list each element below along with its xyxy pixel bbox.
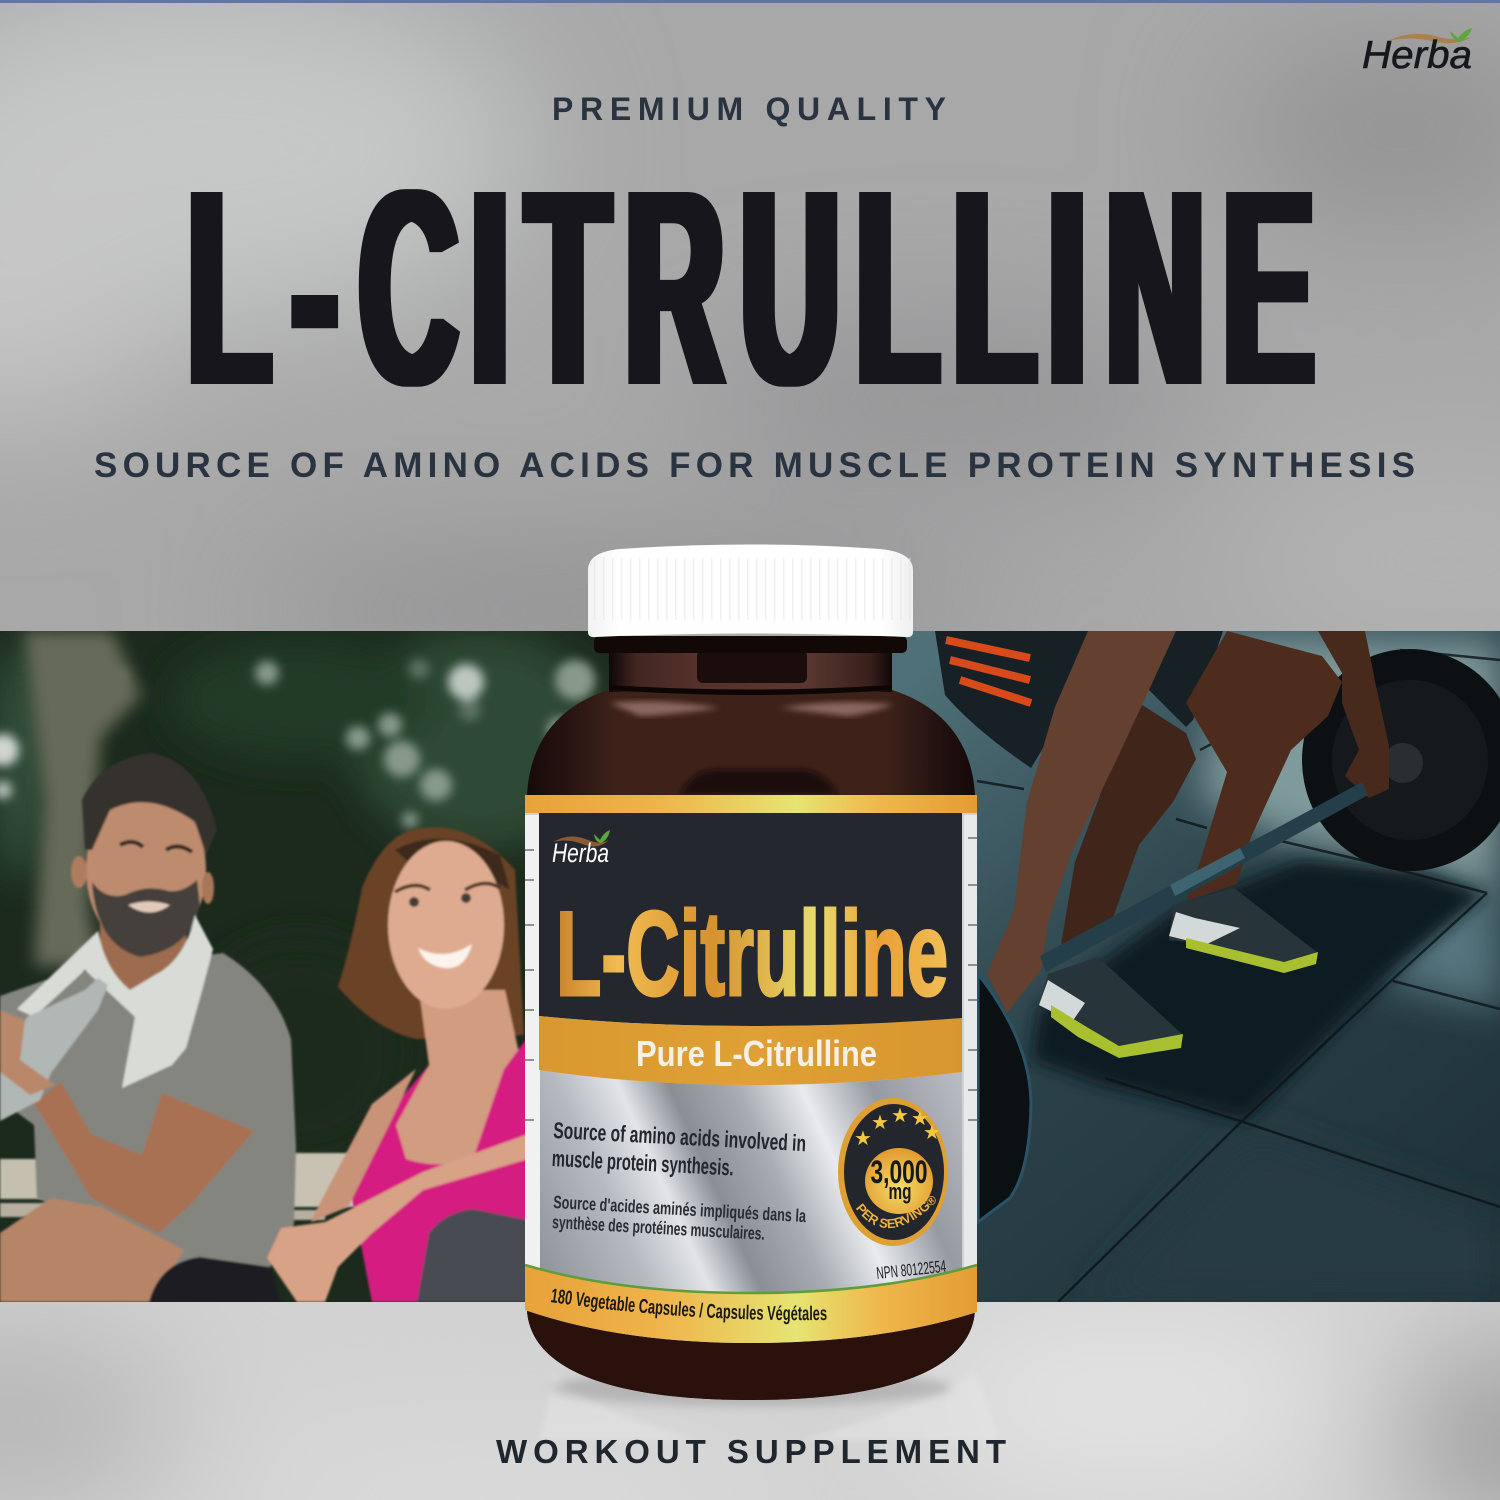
label: side strips: [525, 795, 977, 1355]
background: upper grey panel: [0, 0, 1500, 670]
bench: [0, 1153, 355, 1220]
woman: hair: [338, 827, 524, 1039]
floor tile seams: [977, 650, 1500, 1302]
label: English claim: Source of amino acids involved in: [553, 1117, 807, 1156]
man: hand: [0, 1010, 55, 1095]
woman: neck and chest: [390, 990, 525, 1180]
woman: pink top: [352, 1037, 528, 1302]
shoe: back: [1169, 888, 1318, 973]
bottle collar: [594, 636, 907, 653]
man: face: [84, 800, 208, 924]
badge: 3,000 mg per serving: ★: [891, 1105, 909, 1127]
label: top gold band: [525, 795, 977, 813]
subtitle: source of amino acids: SOURCE OF AMINO ACIDS FOR MUSCLE PROTEIN SYNTHESIS: [94, 446, 1415, 485]
barbell plate, right: [1302, 649, 1500, 871]
label: French claim: [552, 1192, 807, 1246]
bottle body: [527, 690, 975, 1400]
label: Pure L-Citrulline: Pure L-Citrulline: [636, 1033, 877, 1074]
badge: 3,000 mg per serving: mg: [888, 1179, 912, 1204]
man: beard: [92, 880, 200, 957]
label: French claim: synthèse des protéines musculaires.: [552, 1212, 765, 1244]
badge: 3,000 mg per serving: 3,000: [870, 1154, 928, 1190]
woman: forearm and hands: [267, 1134, 528, 1302]
label: English claim: muscle protein synthesis.: [551, 1145, 734, 1180]
badge: 3,000 mg per serving: PER SERVING®: [856, 1196, 936, 1228]
title: L-CITRULLINE: L-CITRULLINE: [188, 131, 1314, 444]
bag strap: [149, 1257, 280, 1302]
label: bottom gold band: [525, 1265, 977, 1360]
bottle neck: [609, 650, 892, 692]
label: French claim: Source d'acides aminés impliqués dans la: [553, 1192, 807, 1226]
shoulder highlights: [610, 701, 720, 716]
photo: couple resting outdoors: [0, 630, 610, 1302]
background: lower grey panel: [0, 1302, 1500, 1500]
label: product name: L-Citrulline: [556, 887, 948, 1021]
floor shadow: [1031, 860, 1487, 1121]
woman: face: [388, 841, 504, 1009]
photo: athlete lifting a barbell: [890, 631, 1500, 1302]
man: towel: [17, 915, 213, 1088]
woman: upper arm: [311, 1069, 416, 1222]
footer: workout supplement: WORKOUT SUPPLEMENT: [496, 1433, 1006, 1470]
badge: 3,000 mg per serving: ★: [854, 1128, 872, 1150]
badge: 3,000 mg per serving: ★: [871, 1112, 889, 1134]
man: leg: [0, 1198, 184, 1302]
water bottle: [0, 978, 108, 1121]
eyebrow: premium quality: PREMIUM QUALITY: [552, 91, 946, 127]
bottle lower tint: [527, 1310, 975, 1400]
label: NPN number: NPN 80122554: [875, 1257, 947, 1283]
athlete: shorts: [935, 631, 1223, 768]
label: English claim: [551, 1117, 807, 1184]
bottle cap: [588, 544, 913, 637]
barbell plate, left: [978, 974, 1031, 1222]
shoe: front: [1039, 957, 1183, 1058]
label: Herba logo: [552, 830, 610, 868]
product label: [525, 795, 977, 1360]
athlete: near arm: [987, 631, 1176, 1013]
badge: 3,000 mg per serving: [838, 1098, 948, 1246]
athlete: front leg: [1186, 631, 1342, 901]
athlete: back leg: [1061, 703, 1196, 944]
brand logo: Herba: Herba: [1362, 34, 1472, 77]
man: arm: [34, 1082, 254, 1233]
label: silver panel: [540, 1070, 962, 1294]
label: dark panel: [539, 813, 962, 1026]
label: middle gold band: [539, 1016, 962, 1085]
bottle reflection: [540, 1370, 1000, 1440]
tree trunk: [24, 631, 142, 966]
shoulder dark reflection: [680, 769, 838, 795]
product bottle: [525, 544, 977, 1436]
barbell bar: [1040, 782, 1368, 972]
athlete: far arm and hand: [1318, 631, 1389, 798]
man: torso: [0, 953, 296, 1270]
badge: 3,000 mg per serving: ★: [911, 1108, 929, 1130]
badge: 3,000 mg per serving: ★: [923, 1122, 941, 1144]
label: Herba logo: Herba: [552, 838, 609, 868]
label: capsule count: 180 Vegetable Capsules / Capsules Végétales: [550, 1288, 827, 1324]
bottle contact shadow: [551, 1370, 951, 1406]
bright floor behind plate: [1090, 640, 1500, 1302]
man: hair: [82, 753, 217, 855]
woman: leggings: [417, 1209, 528, 1302]
man: neck: [98, 922, 188, 990]
foliage bokeh: [0, 631, 608, 882]
